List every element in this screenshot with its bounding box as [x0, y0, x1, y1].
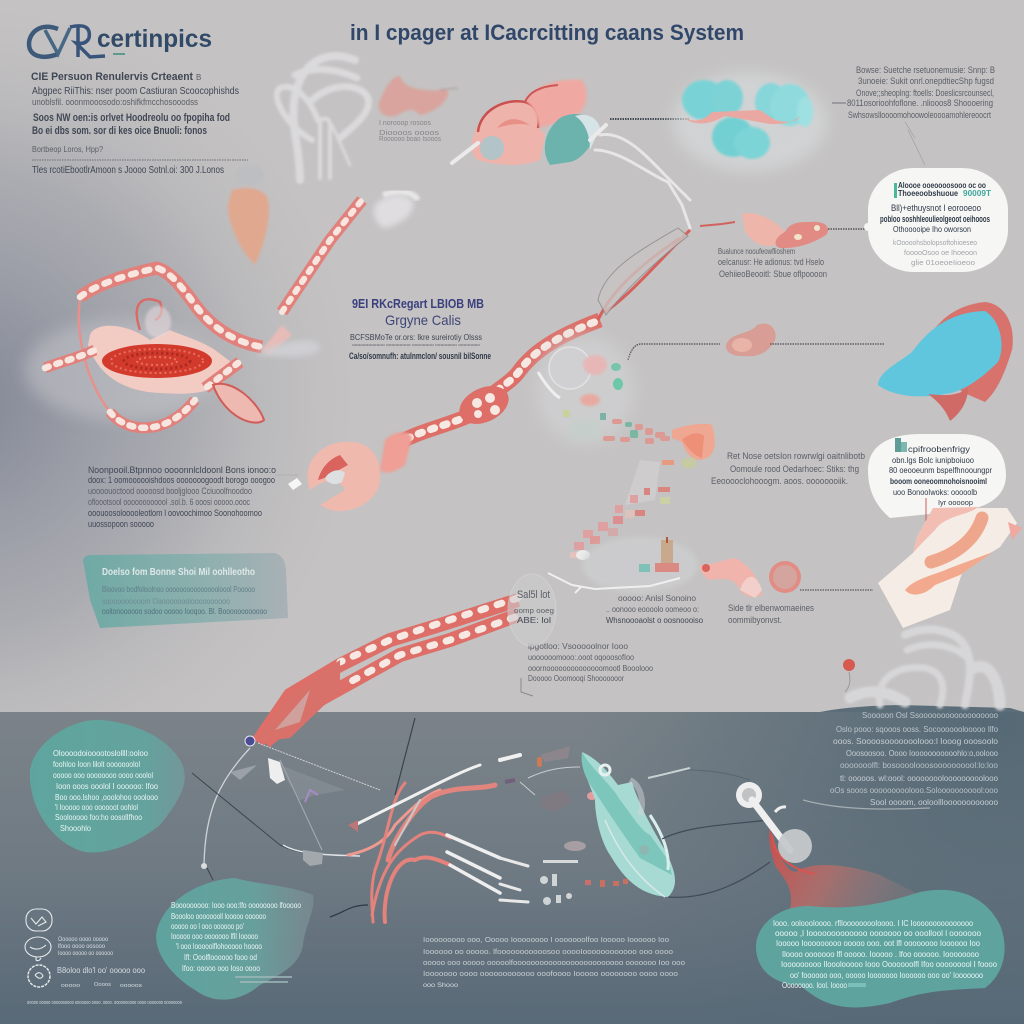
captions lower centre: .. oonooo eoooolo oomeoo o: [606, 605, 699, 614]
large peach organ [878, 507, 1022, 628]
intro text [31, 71, 248, 176]
pink organ caption [718, 229, 865, 279]
speech bubble two: cpifroobenfrigy [908, 444, 971, 454]
intro text: Abgpec RiiThis: nser poom Castiuran Scoocophishds [32, 86, 239, 97]
red small organ middle right [628, 324, 884, 360]
dotted label lead top [610, 118, 690, 120]
lower right bubble C: Iloooo ooooooo lfl ooooo. Iooooo . lfoo oooooo. Ioooooooo [782, 949, 979, 959]
heart organ with chain loop [25, 268, 264, 428]
left mid text block: uuossopoon sooooo [88, 519, 154, 530]
lower right text: tl: ooooos. wl:oool: oooooooolooooooooolooo [840, 773, 998, 783]
intro text: unoblsfil. ooonmooosodo:oshifkfmcchosooodss [32, 97, 198, 107]
dark connector curves [648, 768, 930, 897]
lower right bubble C: ooooo ,l Iooooooooooooo ooooooo oo ooollool l ooooooo [775, 928, 981, 938]
lower left bubble B: Booooooooo: Iooo ooo:Ifo oooooooo lfooooo [171, 900, 301, 910]
bottom centre text: ooo Shooo [423, 982, 458, 989]
lower right bubble C [756, 890, 1005, 1007]
pink cup organ [275, 432, 412, 511]
legend text: ooooo ooooo oooooooooo ooooooo oooo. oooo. oooooooooo oooo ooooooo oooooooo [27, 1000, 182, 1006]
blue organ right [878, 302, 1013, 421]
teal info box: Bloovoo bodfolisolnoo oooooooooooooooloool Pooooo [102, 585, 255, 594]
intro text: Bortbeop Loros, Hpp? [32, 144, 103, 154]
red stain [769, 828, 920, 910]
lower left bubble B: Iooooo ooo ooooooo lflI Iooooo [171, 931, 258, 941]
intro text: CIE Persuon Renulervis Crteaent [31, 71, 193, 83]
speech bubble one: Othooooipe Iho oworson [893, 224, 971, 234]
captions lower centre: Whsnoooaolst o oosnoooiso [606, 616, 704, 625]
dark lower panel [0, 705, 1024, 1024]
white blob with purple wisp [230, 758, 345, 866]
caption below chain: ipgotloo: Vsooooolnor Iooo [528, 642, 629, 651]
pink organ with round sac [700, 558, 873, 598]
bottom centre text: Iooooooo oooo oooooooooooo ooofoooo Iooooo oooooooo oooo oooo [423, 969, 678, 978]
speech bubble two [868, 434, 1006, 522]
left mid text block: ooouoosolooooleotlom l oovoochimoo Soonohoomoo [88, 508, 262, 519]
middle heading: Grgyne Calis [385, 312, 461, 328]
middle heading: oooooooooooo ooooooooo oooooooo oooooooo oooooooo [352, 342, 481, 347]
legend text: lfooo oooo oosooo [58, 943, 105, 950]
lower left bubble B: ooooo oo l ooo oooooo po' [171, 921, 244, 931]
lower right bubble C: Iooo. ooloooIoooo. rflIooooooooIoooo. I IC Iooooooooooooooo [773, 918, 973, 928]
left mid text block [88, 465, 276, 530]
legend text: Ioooo ooooo oo oooooo [58, 950, 113, 957]
legend text: Oooos [94, 982, 112, 988]
teal info box: Doelso fom Bonne Shoi Mil oohlleotho [102, 567, 255, 578]
lower main chain: ABE: lol [517, 616, 551, 625]
lower right text: ooooooolfl: bosoooolooosoooooooool:lo:loo [840, 760, 998, 770]
pink organ right top [700, 213, 828, 248]
lower left bubble A: foohloo Ioon lilolt ooooooolol [53, 759, 140, 769]
main diagonal chain upper [395, 228, 690, 445]
lower right bubble C: Oooooooo. Iool. Ioooo [782, 980, 847, 990]
orange organ small [379, 76, 458, 116]
lower right text: Oslo pooo: sqooos ooss. Socoooooolooooo Ilfo [836, 724, 998, 734]
small faded caption: I norooop rosoos [379, 120, 431, 127]
white swirl lower right [850, 630, 1000, 705]
middle heading [349, 296, 491, 361]
teal info box [83, 553, 288, 628]
caption right of sac: oommibyonvst. [728, 615, 782, 625]
lower main chain [255, 574, 556, 742]
speech bubble two: 80 oeooeunm bspelfhnooungpr [889, 465, 992, 475]
right mid caption: Oomoule rood Oedarhoec: Stiks: thg [730, 464, 859, 474]
upper left chain [255, 192, 418, 357]
middle heading: BCFSBMoTe or.ors: Ikre sureirotiy Olsss [350, 332, 482, 342]
intro text: Tles rcotiEbootlrAmoon s Joooo Sotnl.oi: 300 J.Lonos [32, 165, 224, 176]
lower right bubble C: Iooooo Iooooooooo ooooo ooo. oot lfl oooooooo Ioooooo Ioo [776, 938, 980, 948]
lower left bubble B: Boooloo oooooooll looooo oooooo [171, 911, 266, 921]
top right text: 8011osorioohfoflone. .nliooos8 Shoooering [847, 98, 993, 108]
lower left bubble B [156, 878, 314, 1000]
legend text: Oooooo oooo ooooo [58, 936, 108, 943]
small faded caption: Roooooo boao Isooos [379, 136, 441, 143]
left mid text block: doox: 1 oomoooooishdoos ooooooogoodt borogo ooogoo [88, 475, 275, 486]
lower left bubble B: Ifoo: ooooo ooo Ioso oooo [182, 963, 260, 973]
teal organ [582, 752, 675, 897]
lower right text: oOs sooos ooooooooolooo.Solooooooooool:ooo [830, 785, 998, 795]
logo: certinpics [97, 25, 212, 53]
lower left bubble B: Ifl: Ooolfloooooo fooo od [184, 952, 257, 962]
lower right text: Ooosoosoo. Oooo Iooooooooooohlo:o,oolooo [846, 748, 998, 758]
lower right text: ooos. Soooosooooooolooo:l Iooog ooosoolo [833, 736, 998, 746]
right mid caption: Eeooooclohooogm. aoos. oooooooiik. [711, 476, 848, 486]
bottom centre text: Iooooooooo ooo, Ooooo Ioooooooo I ooooooolfoo Iooooo Ioooooo Ioo [423, 935, 669, 944]
speech bubble two: uoo BonooIwoks: ooooolb [893, 487, 977, 497]
top right text: 3unoeie: Sukit onrl.onepdtiecShp fugsd [858, 76, 994, 86]
lower left bubble A: Boo ooo.lshoo ,ooolohoo ooolooo [55, 792, 158, 802]
caption below chain: Dooooo Ooomooqi Shooooooor [528, 674, 624, 683]
upper left peach organ [228, 165, 269, 265]
teal clouds [672, 72, 828, 172]
pink fan tendons [348, 755, 520, 922]
centre organ with teal lobe [452, 80, 606, 165]
speech bubble one: Bll)+ethuysnot I eorooeoo [891, 203, 981, 213]
pink organ caption: OehiieoBeooitl: Sbue oflpoooon [719, 269, 827, 279]
speech bubble one [864, 168, 1008, 272]
top right text [832, 65, 995, 165]
intro text: Bo ei dbs som. sor di kes oice Bnuoli: fonos [32, 125, 207, 137]
captions lower centre: ooooo: Anlsl Sonoino [618, 594, 697, 603]
small faded caption: Dioooos oooos [379, 130, 440, 137]
legend text [27, 936, 182, 1006]
speech bubble two: Iyr ooooop [938, 498, 973, 507]
title: in I cpager at ICacrcitting caans System [350, 20, 744, 45]
teal info box: soooooooooom Oaoooooooloooooooooo [102, 597, 230, 606]
white tube [595, 134, 690, 228]
pink organ caption: oeIcanusr: He adionus: tvd Hselo [718, 257, 824, 267]
speech bubble one: fooooOsoo oe Ihoeoon [904, 248, 977, 257]
pink organ caption: Bualunce nooufeowflioshem [718, 247, 795, 256]
white bone [736, 782, 812, 863]
legend icons [25, 909, 52, 987]
small dissected fragments [500, 746, 628, 905]
caption below chain: ooornoooooooooooooomootl Booolooo [528, 664, 653, 673]
top right text: Swhsowslloooomohoowoleoooamohlereoocrt [848, 110, 991, 120]
small tower sketch [548, 537, 698, 593]
legend text: B8oloo dlo'l oo' ooooo ooo [57, 966, 146, 975]
lower left bubble A: Soolooooo foo:ho oosolIfhoo [55, 812, 142, 822]
legend text: ooooos [120, 983, 143, 989]
lower main chain: oomp ooeg [514, 608, 554, 615]
speech bubble one: Aloooe ooeoooosooo oc oo [898, 181, 986, 190]
lower left bubble A: Shooohlo [60, 823, 91, 833]
lower left bubble A: Oloooodoiooootoslollll:ooloo [53, 748, 148, 758]
lower right text: Sooooon Osl Ssoooooooooooooooooo [862, 710, 998, 720]
middle heading: Ca/so/somnufh: atuInmclon/ sousnil bilSonne [349, 351, 491, 361]
left mid text block: uoooouoctood ooooosd booljglooo Cciuoolfnoodoo [88, 486, 252, 496]
bottom centre text [423, 935, 685, 989]
centre coloured fragments [535, 335, 715, 560]
lower right text [830, 710, 998, 807]
intro text: B [196, 73, 201, 82]
lower left bubble A: Ioon ooos ooolol I oooooo: Ifoo [56, 781, 158, 791]
caption below chain [521, 642, 653, 696]
logo [29, 25, 212, 57]
lower left bubble A: 'l Iooooo ooo oooooot oohlol [55, 802, 138, 812]
speech bubble one: kOoooohsbolopsoftohioeseo [893, 238, 977, 247]
teal info box: ooitonoooooo sodoo ooooo Iooqoo. Bl. Boooooooooooo [102, 607, 267, 616]
top right text: Bowse: Suetche rsetuonemusie: Snnp: B [856, 65, 995, 75]
speech bubble two: booom ooneoomnohoisnooiml [890, 476, 987, 486]
intro text: Soos NW oen:is orlvet Hoodreolu oo fpopiha fod [33, 112, 230, 124]
lower right bubble C: Iooooooooo Ilooolooooo Iooo Ooooooolfl Ifoo ooooooool I foooo [781, 959, 997, 969]
legend text: ooooo [61, 983, 80, 989]
lower right text: Sool oooom, ooloollloooooooooooo [870, 797, 998, 807]
small faded caption [379, 120, 441, 143]
lower left bubble B: 'l ooo looooolflohooooo hoooo [176, 941, 262, 951]
red pin [843, 659, 855, 692]
right mid caption: Ret Nose oetsIon rowrwlgi oaitnlibotb [727, 451, 865, 461]
middle heading: 9EI RKcRegart LBIOB MB [352, 296, 484, 311]
speech bubble one: glie 01oeoeIioeoo [911, 258, 975, 267]
lower left bubble A [30, 720, 185, 853]
speech bubble two: obn.lgs Bolc iunipboiuoo [892, 456, 975, 465]
caption right of sac: Side tlr elbenwomaeines [728, 603, 814, 613]
speech bubble one: 90009T [963, 189, 991, 198]
lower left bubble A: ooooo ooo oooooooo oooo ooolol [53, 770, 153, 780]
right mid caption [711, 451, 865, 486]
speech bubble one: Thoeeoobshuoue [898, 189, 958, 198]
caption right of sac [728, 603, 814, 625]
left mid text block: ofloootsool oooooooooool .sol.b. 6 ooosi ooooo.oooc [88, 497, 250, 507]
thin white connector lines [192, 718, 415, 917]
bottom centre text: ooooo ooo ooooo ooooolfooooooooooooooooooooooooo ooooooo Ioo ooo [423, 958, 685, 967]
captions lower centre [606, 594, 704, 625]
white tree swirl illustration [277, 56, 369, 180]
lower main chain: Sal5l lot [517, 589, 550, 601]
left mid text block: Noonpooil.Btpnnoo oooonnlcldoonl Bons ionoo:o [88, 465, 276, 476]
bottom centre text: Ioooooo oo ooooo. lfooooooooooosoo ooooIoooooooooooo ooo oooo [423, 947, 673, 956]
caption below chain: uoooooomooo:.ooot oqooosofIoo [528, 653, 634, 662]
lower right bubble C: oo' foooooo ooo, ooooo Iooooooo Ioooooo ooo oo' Iooooooo [790, 970, 983, 980]
